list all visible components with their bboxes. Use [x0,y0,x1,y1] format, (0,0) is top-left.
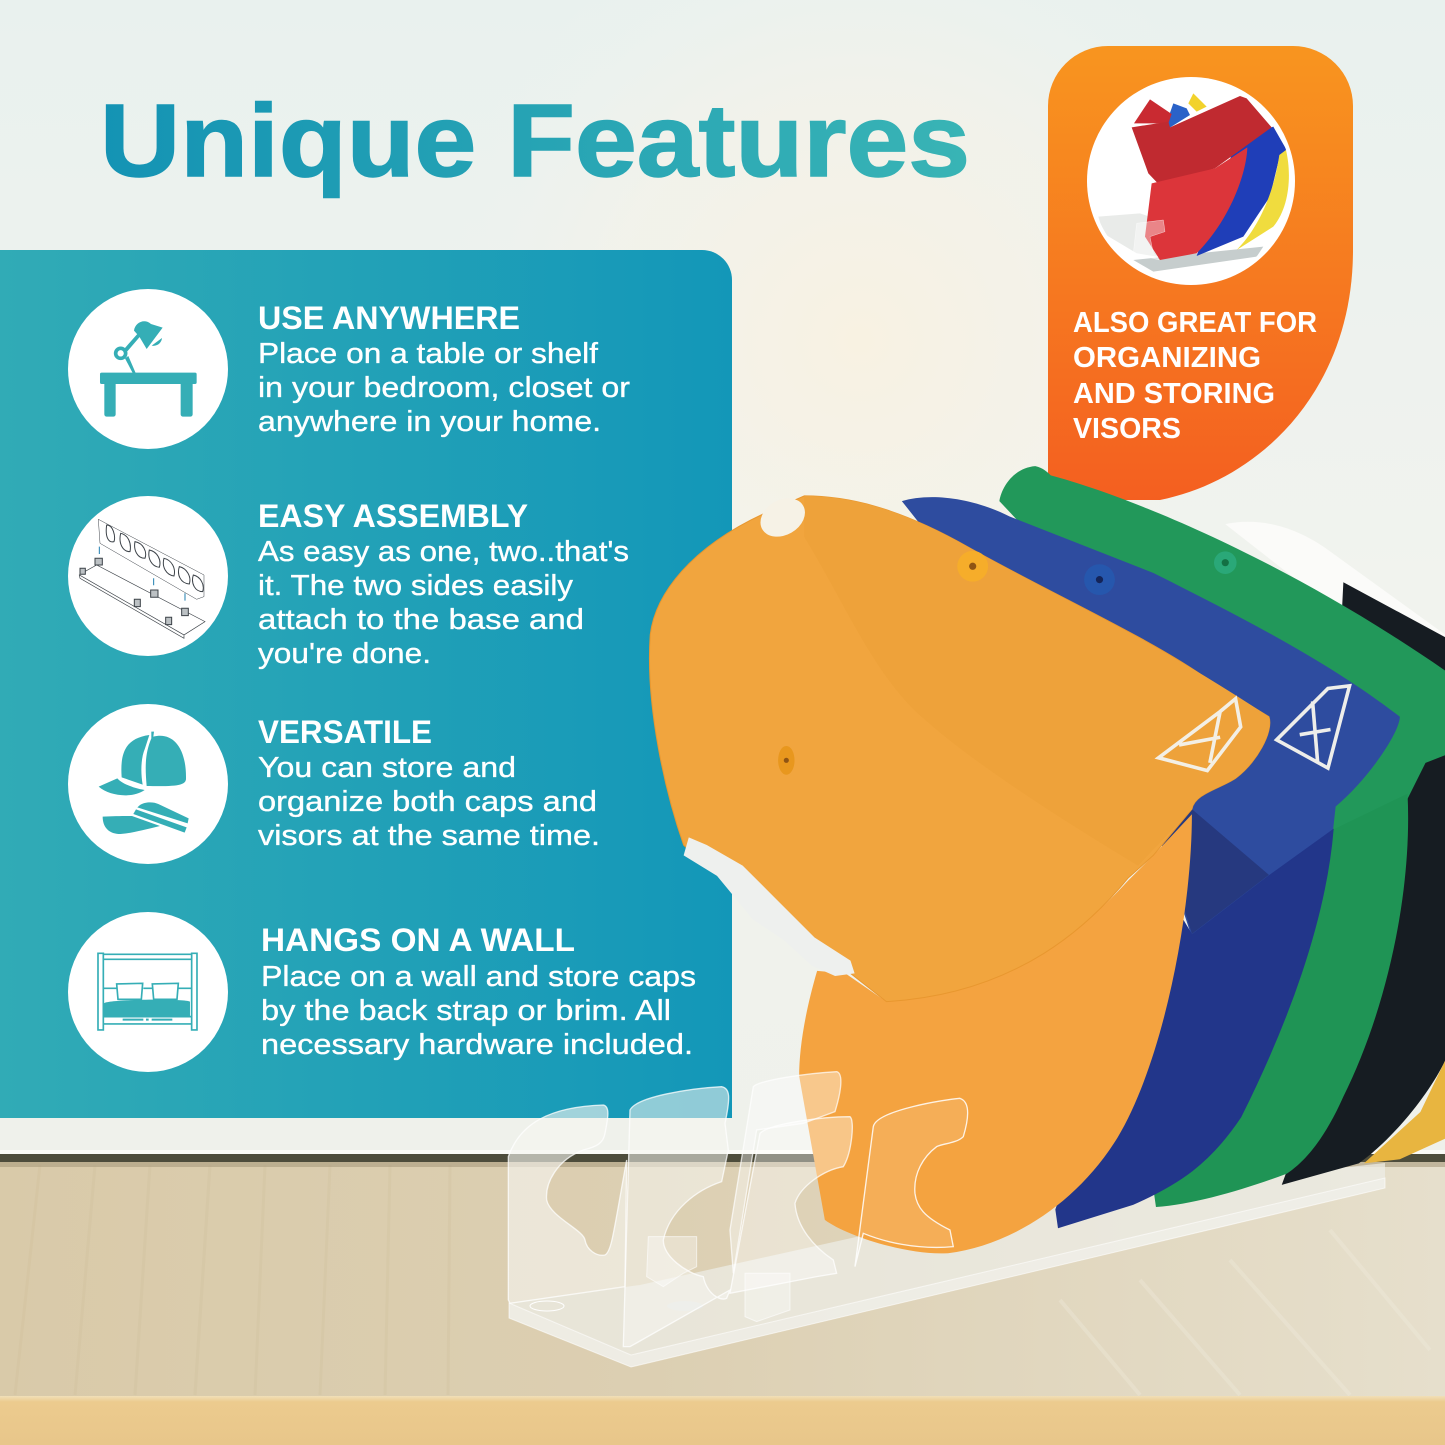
acrylic slot 4 [730,1117,852,1293]
cap: orange front panel shading [804,496,1270,866]
body text: it. The two sides easily [258,570,574,602]
cap: white rear [1225,522,1445,676]
body text [258,536,629,670]
cap: yellow rear [1364,1061,1445,1163]
callout: visors [1048,46,1353,500]
acrylic slot 1 [508,1105,627,1303]
feature: versatile [68,704,600,864]
wooden floor [0,1150,1445,1400]
feature: use anywhere [68,289,630,449]
heading: USE ANYWHERE [258,300,520,336]
feature: hangs on a wall [68,912,696,1072]
title: Unique Features [100,83,970,198]
product: acrylic rack [508,1072,968,1347]
icon: assembly diagram [68,496,228,656]
body text: necessary hardware included. [261,1029,693,1061]
panel: features [0,250,732,1118]
body text: Place on a wall and store caps [261,961,696,993]
body text: You can store and [258,752,516,784]
body text: organize both caps and [258,786,597,818]
icon: cap and visor [68,704,228,864]
acrylic base [509,1163,1385,1367]
body text [261,961,696,1061]
acrylic slot 5 [855,1098,968,1267]
acrylic slot 3 [730,1072,841,1273]
body text: you're done. [258,638,431,670]
callout text: ALSO GREAT FOR [1073,307,1317,339]
photo: stacked visors [1087,77,1295,285]
callout text: ORGANIZING [1073,342,1261,374]
feature: easy assembly [68,496,629,670]
body text [258,752,600,852]
cap: orange brim [799,814,1192,1253]
table edge [0,1396,1445,1445]
callout text: VISORS [1073,413,1181,445]
body text: attach to the base and [258,604,584,636]
orange badge [1048,46,1353,500]
body text: anywhere in your home. [258,406,601,438]
body text: by the back strap or brim. All [261,995,671,1027]
body text: As easy as one, two..that's [258,536,629,568]
cap: black [1282,582,1445,1185]
cap: blue [902,497,1400,1228]
acrylic pegs [647,1237,790,1322]
heading: EASY ASSEMBLY [258,498,528,534]
body text [258,338,630,438]
body text: visors at the same time. [258,820,600,852]
callout text: AND STORING [1073,378,1275,410]
callout text [1073,307,1317,445]
body text: in your bedroom, closet or [258,372,630,404]
heading: HANGS ON A WALL [261,922,575,958]
icon: desk lamp on table [68,289,228,449]
acrylic slot 2 [623,1087,730,1347]
heading: VERSATILE [258,714,432,750]
icon: canopy bed [68,912,228,1072]
photo: stack of caps [649,466,1445,1253]
cap details: button, eyelets, logos [684,491,1241,976]
cap: green [999,466,1445,1207]
body text: Place on a table or shelf [258,338,599,370]
cap: orange crown [649,496,1270,1002]
